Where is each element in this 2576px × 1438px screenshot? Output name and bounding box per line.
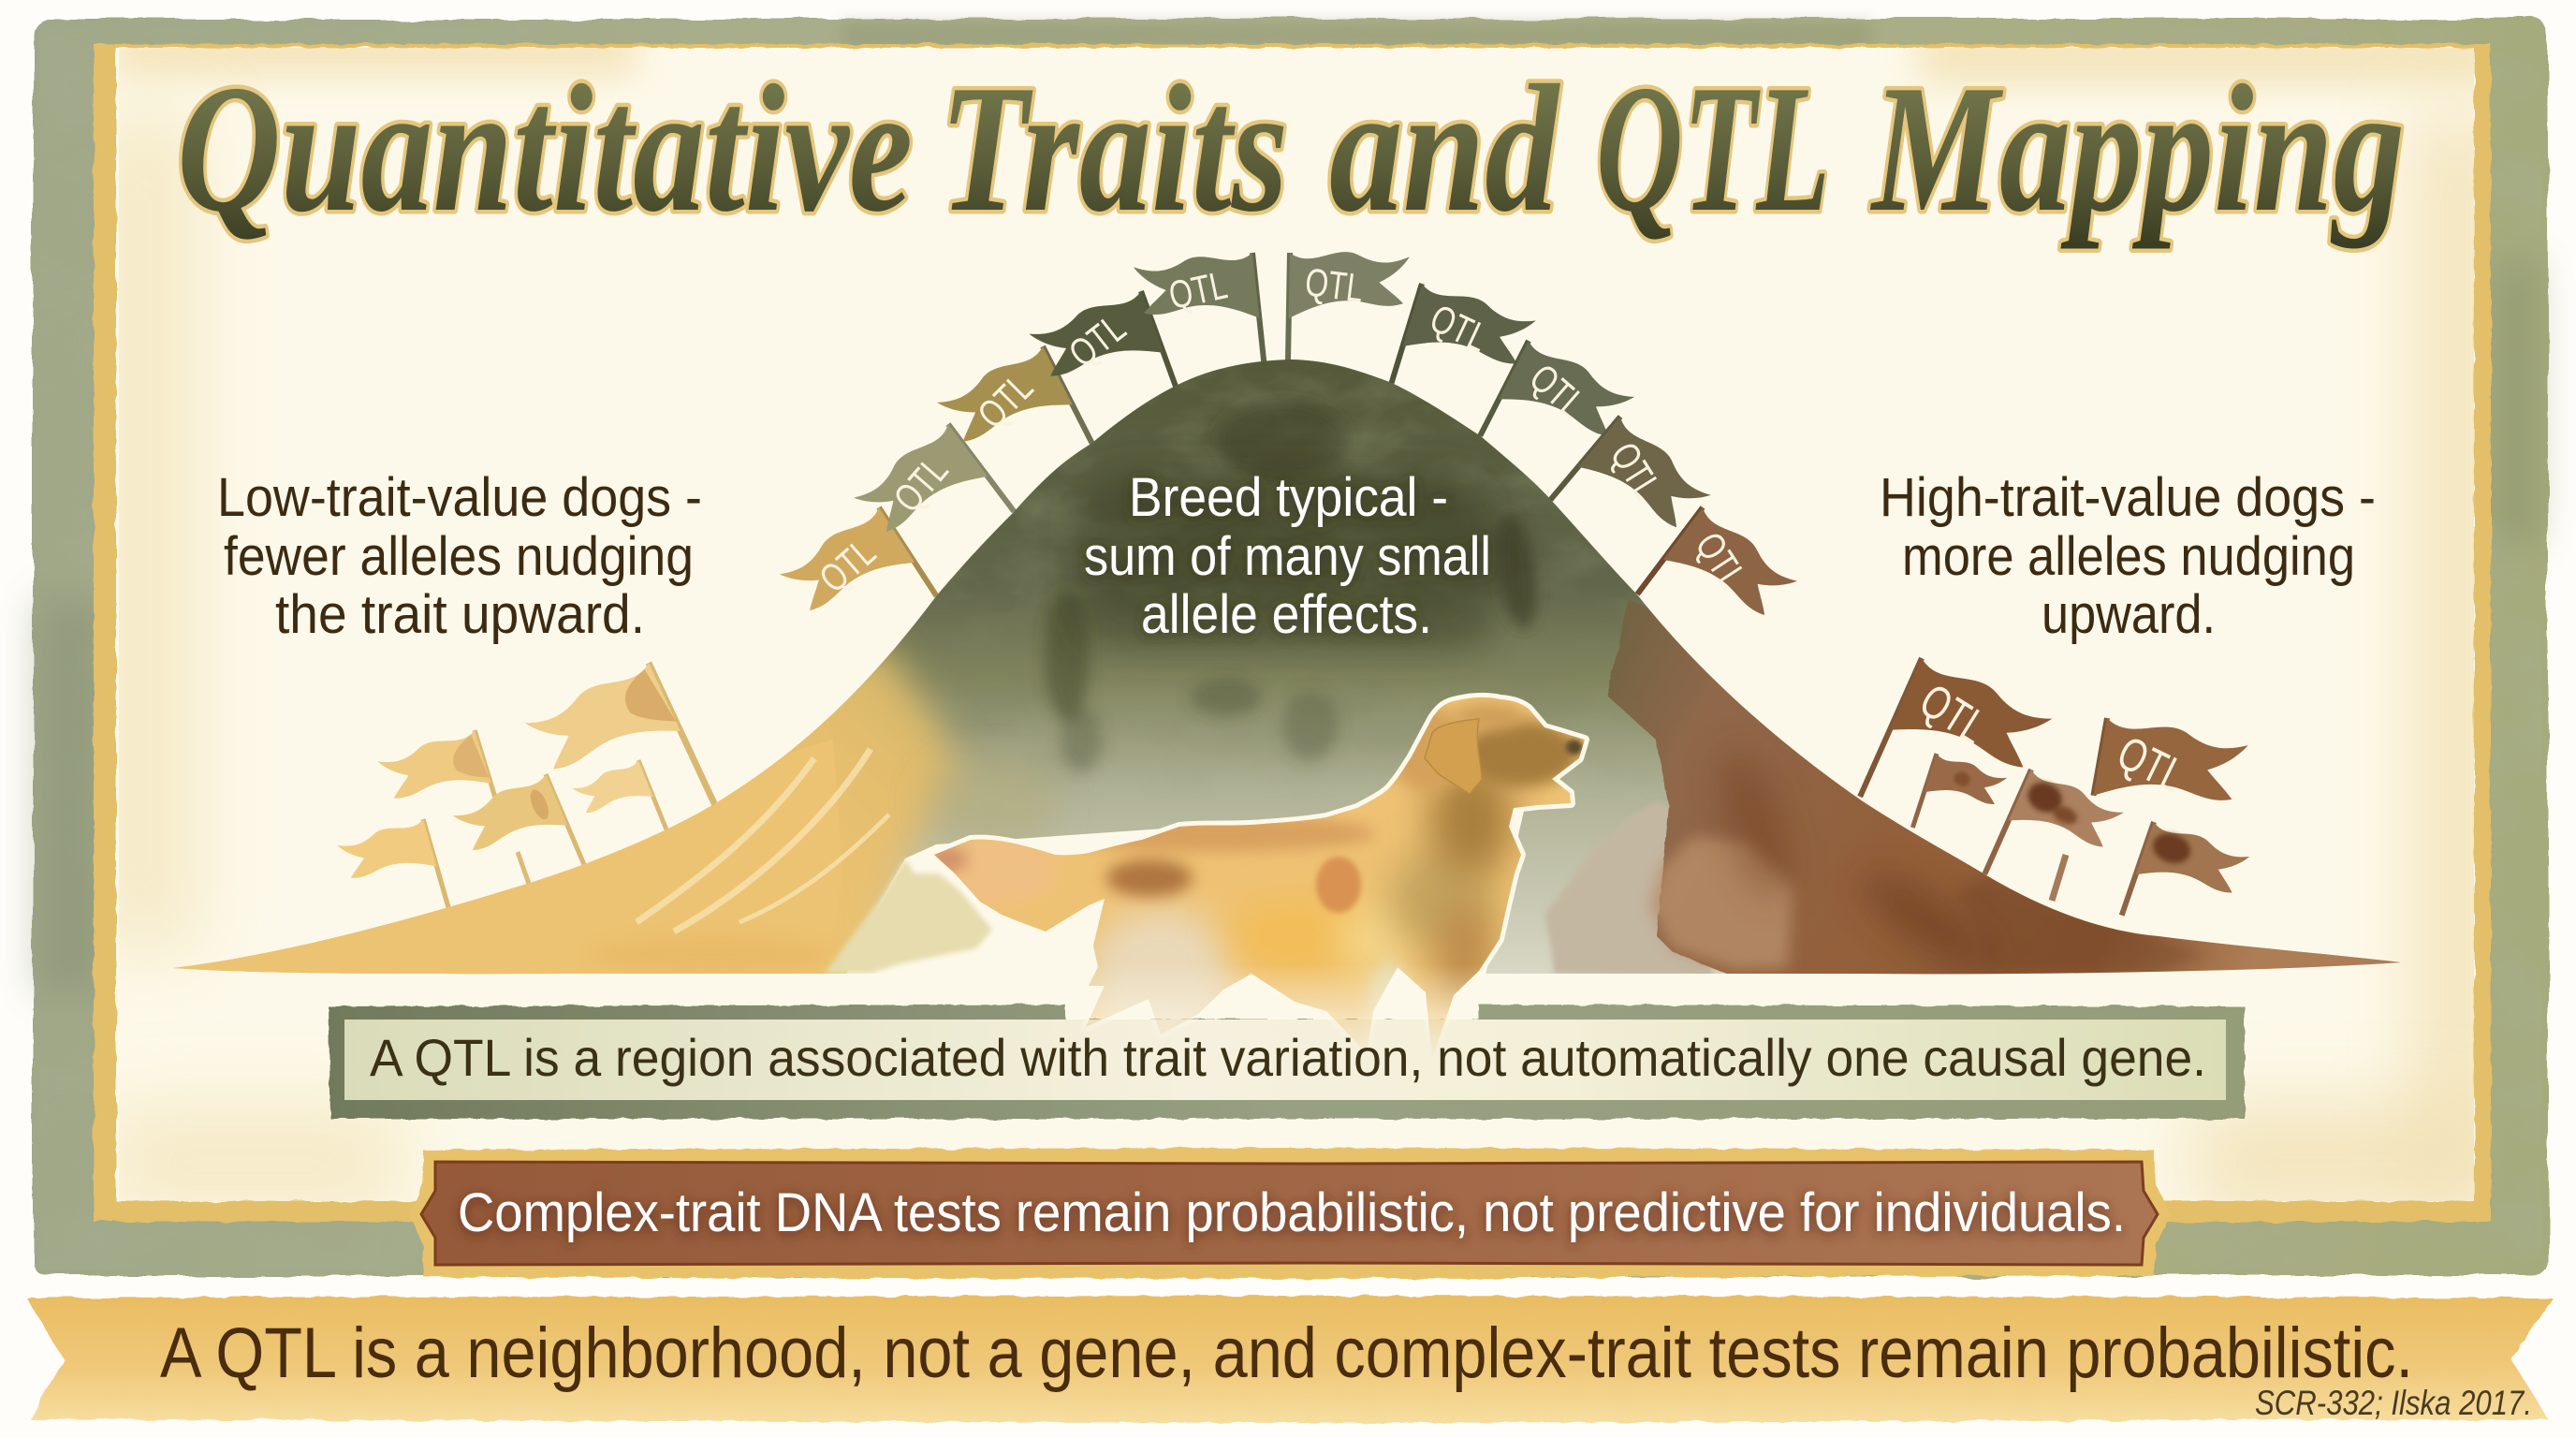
bottom ribbon takeaway (26, 1296, 2553, 1423)
source citation: SCR-332; Ilska 2017. (2255, 1384, 2532, 1422)
flag 2: QTL (885, 448, 957, 521)
pale gold flags on low tail (336, 661, 714, 941)
gold slope (112, 646, 964, 992)
flag 7 (1392, 282, 1537, 418)
title: Mapping (1870, 48, 2405, 250)
flag 5 (1134, 251, 1264, 375)
pale tan wash under the tail (824, 858, 992, 974)
flag pole stub (2052, 855, 2066, 901)
title: Quantitative (177, 48, 913, 250)
flag G3 (1984, 769, 2125, 916)
flag 1 (778, 506, 937, 661)
flag D (571, 759, 666, 857)
flag C (451, 773, 588, 913)
flag 4 (1028, 289, 1176, 427)
flag 7: QTL (1424, 296, 1495, 360)
dark washes on the hill (1045, 401, 1543, 772)
text: low-trait-value dogs (217, 467, 702, 645)
brown banner (410, 1148, 2171, 1279)
flag 3 (935, 345, 1092, 497)
brown banner: Complex-trait DNA tests remain probabilistic, not predictive for individuals. (458, 1182, 2126, 1243)
callout box: QTL is a region (329, 1005, 2245, 1119)
brown flags on high tail (1860, 656, 2250, 948)
paper panel (94, 28, 2499, 1217)
title: Traits (940, 48, 1288, 250)
flag G1 (1860, 656, 2054, 855)
flag 6 (1288, 251, 1410, 362)
bell curve hill (173, 360, 2400, 974)
text: low-trait-value dogs: Low-trait-value dogs - (217, 467, 702, 528)
pale blob on brown slope (1650, 836, 1793, 970)
flag G1: QTL (1911, 673, 1997, 754)
flag G2 (1912, 753, 2008, 851)
orange foot wash (611, 944, 812, 966)
text: QTL is a region: A QTL is a region associated with trait variation, not automatically one causal gene. (370, 1028, 2206, 1087)
paper halo around the dog (934, 697, 1585, 1058)
text: low-trait-value dogs: fewer alleles nudging (224, 526, 694, 587)
flag G4: QTL (2110, 726, 2193, 803)
flag 10: QTL (1687, 524, 1755, 597)
text: breed typical (1084, 467, 1491, 645)
paper gap under the dog and tail (846, 811, 1524, 974)
flag E (336, 818, 451, 941)
flag B (376, 728, 496, 830)
flag 8 (1480, 339, 1636, 491)
flag 4: QTL (1061, 305, 1134, 375)
text: high-trait-value dogs: High-trait-value dogs - (1880, 467, 2376, 528)
arc of QTL flags along the top of the curve (778, 251, 1799, 667)
title (177, 48, 2405, 250)
text: breed typical: Breed typical - (1129, 467, 1448, 528)
flag 8: QTL (1521, 355, 1594, 427)
text: high-trait-value dogs (1880, 467, 2376, 645)
text: high-trait-value dogs: more alleles nudging (1902, 526, 2355, 587)
flag 10 (1637, 506, 1799, 667)
flag pole stub (518, 852, 534, 897)
text: low-trait-value dogs: the trait upward. (275, 584, 645, 645)
watercolor mottling on the hill (957, 377, 1647, 607)
text: breed typical: sum of many small (1084, 526, 1491, 587)
flag 1: QTL (811, 530, 884, 601)
dark brown bands (1709, 745, 1801, 902)
text: high-trait-value dogs: upward. (2042, 584, 2216, 645)
dark glow behind centre text (1076, 473, 1498, 651)
dog ear (1425, 719, 1482, 794)
flag 9: QTL (1603, 434, 1670, 507)
title: and (1329, 48, 1560, 250)
olive-tan transition (922, 773, 1058, 844)
title: QTL (1596, 48, 1830, 250)
taupe wash right of the dog (1544, 802, 1713, 978)
flag A (523, 661, 714, 862)
flag 6: QTL (1303, 259, 1366, 310)
brush streaks on gold slope (637, 749, 889, 932)
golden retriever (917, 683, 1610, 1067)
dog colour washes (927, 839, 1058, 902)
flag G4 (2093, 716, 2249, 820)
gold inner border (94, 44, 2491, 1222)
flag 2 (852, 423, 1014, 583)
flag G5 (2122, 821, 2250, 948)
text: breed typical: allele effects. (1141, 584, 1432, 645)
flag 3: QTL (969, 365, 1041, 437)
brown slope (1607, 599, 2434, 992)
flag 5: QTL (1165, 262, 1231, 317)
flag 9 (1550, 416, 1713, 577)
